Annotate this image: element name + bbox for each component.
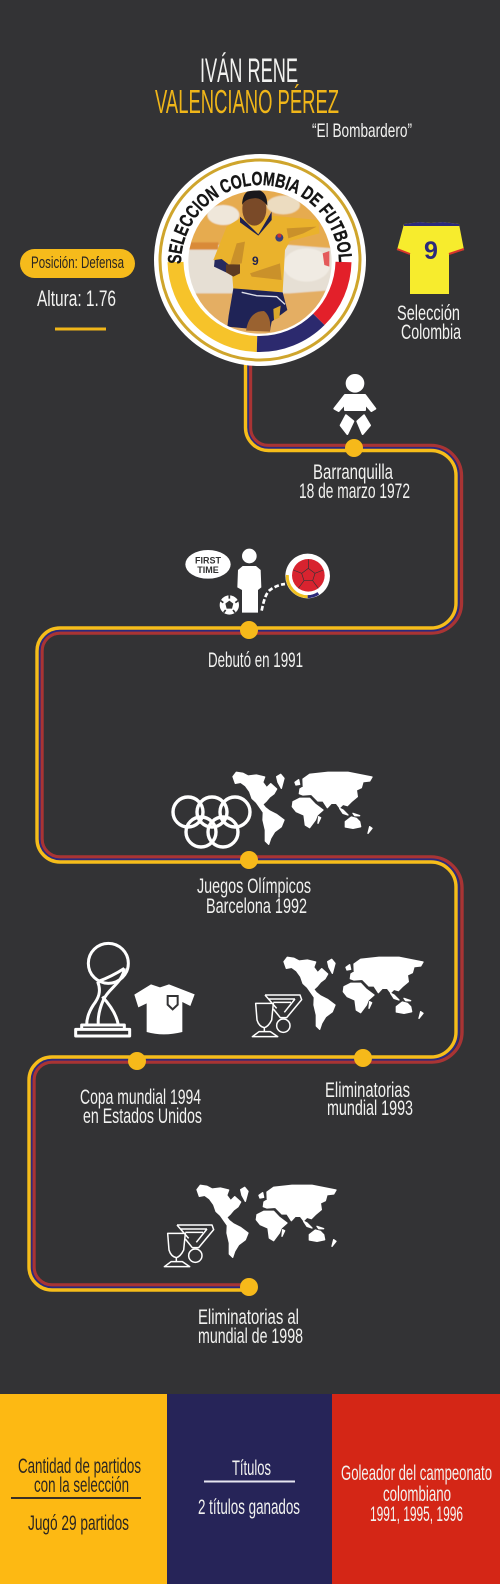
milestone dot: Eliminatorias 1998 [240, 1278, 258, 1296]
panel: top scorer: colombiano [383, 1483, 451, 1506]
panel: titles: 2 títulos ganados [198, 1496, 300, 1519]
milestone dot: birth [345, 439, 363, 457]
icon: cup and medal 1993 [252, 995, 302, 1037]
position pill [20, 249, 135, 278]
hand and cuff [214, 259, 229, 272]
shorts [227, 288, 287, 331]
icon: football shirt [134, 984, 195, 1034]
label: Eliminatorias 1998: mundial de 1998 [198, 1325, 303, 1348]
label: Eliminatorias 1998: Eliminatorias al [198, 1306, 299, 1329]
milestone dot: Olympics [240, 851, 258, 869]
panel: matches played: Jugó 29 partidos [28, 1512, 129, 1535]
title [155, 52, 412, 142]
title: IVÁN RENE [200, 52, 298, 90]
label: Copa 1994: Copa mundial 1994 [80, 1086, 201, 1109]
icon: first time debut [185, 549, 330, 615]
label: Copa 1994 [80, 1086, 202, 1128]
badge lettering: SELECCION COLOMBIA DE FUTBOL [168, 172, 352, 264]
label: Olympics [197, 875, 311, 918]
timeline path [29, 360, 462, 1290]
panel: titles [167, 1394, 332, 1584]
label: Olympics: Juegos Olímpicos [197, 875, 311, 898]
panel: matches played: con la selección [34, 1474, 129, 1497]
label: birth: Barranquilla [313, 461, 393, 484]
label: Eliminatorias 1993: Eliminatorias [325, 1079, 410, 1102]
yellow rule [55, 328, 106, 330]
label: birth: 18 de marzo 1972 [299, 480, 410, 503]
shirt [213, 216, 319, 292]
badge: Selección Colombia de Fútbol [154, 154, 366, 366]
title: VALENCIANO PÉREZ [155, 83, 339, 120]
height label: Altura: 1.76 [37, 286, 116, 311]
player photo: 9 [252, 254, 259, 268]
position pill: Posición: Defensa [31, 253, 124, 272]
label: Eliminatorias 1998 [198, 1306, 303, 1348]
icon: cup and medal 1998 [164, 1225, 214, 1267]
jersey label: Selección [397, 302, 460, 325]
player photo [187, 188, 333, 335]
panel: titles: Títulos [232, 1457, 271, 1480]
milestone dot: Copa 1994 [128, 1052, 146, 1070]
label: Copa 1994: en Estados Unidos [83, 1105, 202, 1128]
icon: world map 1998 [197, 1185, 336, 1257]
panel: matches played: Cantidad de partidos [18, 1455, 141, 1478]
label: birth [299, 461, 410, 503]
jersey label: Colombia [401, 321, 461, 344]
icon: olympic rings [173, 797, 250, 847]
label: Eliminatorias 1993 [325, 1079, 413, 1120]
icon: jersey number 9 [397, 222, 464, 294]
icon: first time debut: FIRST [195, 555, 221, 565]
label: debut: Debutó en 1991 [208, 649, 303, 672]
jersey label [397, 302, 461, 344]
icon: first time debut: TIME [197, 565, 219, 575]
title: “El Bombardero” [312, 120, 412, 142]
icon: world cup trophy [76, 943, 130, 1036]
head [242, 198, 266, 226]
panel: top scorer [332, 1394, 500, 1584]
label: Olympics: Barcelona 1992 [206, 895, 307, 918]
icon: jersey number 9: 9 [424, 237, 438, 265]
icon: world map 1993 [284, 957, 423, 1029]
panel: matches played [0, 1394, 167, 1584]
icon: baby [334, 375, 375, 434]
milestone dot: Eliminatorias 1993 [354, 1049, 372, 1067]
milestone dot: debut [240, 621, 258, 639]
icon: world map, Olympics [233, 772, 372, 844]
label: Eliminatorias 1993: mundial 1993 [327, 1097, 413, 1120]
